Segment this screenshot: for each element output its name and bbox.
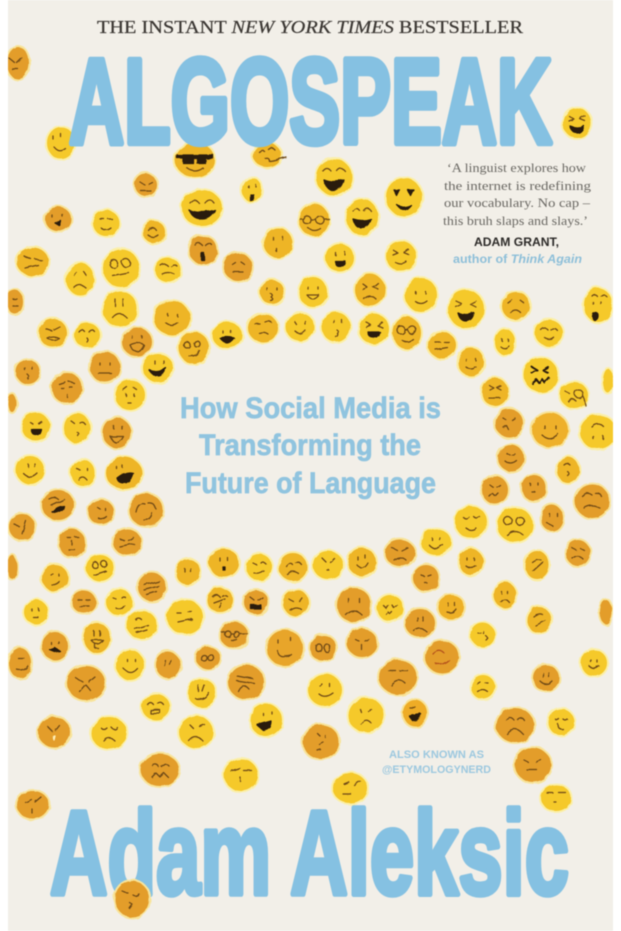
icon: smile face bbox=[15, 455, 45, 485]
icon: wire glasses face bbox=[219, 621, 249, 649]
icon: squinting face bbox=[137, 572, 167, 602]
icon: face at edge bbox=[6, 554, 18, 580]
icon: pained face bbox=[574, 483, 610, 519]
icon: grin face bbox=[325, 243, 355, 273]
icon: smile face bbox=[531, 412, 569, 448]
icon: worried face bbox=[134, 173, 158, 197]
icon: open mouth face bbox=[121, 327, 153, 357]
icon: sleepy face bbox=[376, 594, 404, 622]
icon: face at edge bbox=[6, 289, 24, 315]
icon: round eyes face bbox=[102, 248, 140, 288]
icon: squinting laugh face bbox=[447, 289, 485, 329]
icon: laughing face bbox=[249, 703, 283, 737]
icon: small smile face bbox=[497, 444, 525, 472]
icon: frowning squint face bbox=[354, 273, 386, 307]
icon: smile face bbox=[347, 547, 377, 577]
icon: worried face bbox=[114, 379, 146, 411]
icon: surprised face bbox=[302, 724, 340, 760]
icon: smile face bbox=[298, 276, 328, 308]
icon: upside-down face bbox=[579, 414, 617, 450]
icon: grumpy face bbox=[16, 247, 50, 277]
icon: angry face bbox=[37, 716, 71, 748]
icon: smile face bbox=[580, 649, 608, 677]
icon: winking face bbox=[63, 412, 91, 444]
icon: kissing face bbox=[259, 279, 285, 305]
icon: shouting face bbox=[41, 489, 75, 521]
icon: sad wink face bbox=[70, 459, 96, 487]
icon: smirking face bbox=[437, 594, 465, 620]
icon: sad face bbox=[65, 262, 95, 296]
icon: arch brow face bbox=[73, 322, 101, 348]
icon: frown face bbox=[347, 697, 385, 733]
icon: face at edge bbox=[7, 393, 17, 413]
icon: laughing face bbox=[315, 158, 353, 196]
icon: face at edge bbox=[602, 368, 614, 394]
icon: smile face bbox=[126, 610, 158, 640]
icon: worried face bbox=[470, 674, 496, 700]
icon: face overlapping author name bbox=[114, 880, 150, 918]
icon: pained face bbox=[8, 513, 36, 541]
icon: gritted face bbox=[112, 528, 142, 556]
icon: angry wobbly face bbox=[16, 790, 50, 820]
also known as note: @ETYMOLOGYNERD bbox=[382, 764, 491, 776]
icon: tongue out face bbox=[83, 622, 111, 654]
icon: angry wink face bbox=[66, 665, 106, 701]
icon: pouting face bbox=[38, 318, 68, 348]
icon: sad face bbox=[493, 581, 517, 609]
icon: sad face bbox=[336, 587, 372, 623]
icon: sad face bbox=[495, 707, 535, 743]
icon: smile face bbox=[532, 664, 560, 692]
icon: sly face bbox=[128, 493, 164, 527]
icon: content face bbox=[92, 209, 120, 237]
endorsement quote bbox=[443, 161, 592, 266]
icon: sad face bbox=[378, 659, 418, 695]
icon: grumpy face bbox=[227, 664, 265, 700]
endorsement quote: the internet is redefining bbox=[444, 179, 592, 193]
icon: tongue face bbox=[187, 678, 217, 708]
subtitle: Future of Language bbox=[185, 467, 436, 500]
icon: winking face bbox=[105, 588, 133, 616]
icon: smile face bbox=[420, 528, 452, 556]
icon: angry face bbox=[312, 550, 344, 580]
icon: kissing face bbox=[470, 622, 496, 648]
icon: winking face bbox=[247, 313, 279, 343]
icon: moustache face bbox=[41, 631, 69, 661]
icon: smile face bbox=[41, 564, 69, 592]
icon: sad face bbox=[565, 539, 591, 567]
icon: angry teeth face bbox=[243, 589, 269, 615]
icon: smirking face bbox=[154, 257, 182, 283]
subtitle bbox=[180, 392, 441, 500]
icon: glasses face bbox=[392, 316, 422, 350]
icon: calm face bbox=[547, 708, 575, 736]
icon: kissing face bbox=[556, 456, 580, 484]
icon: grinning face bbox=[345, 198, 379, 236]
subtitle: Transforming the bbox=[199, 429, 421, 462]
icon: small smile face bbox=[494, 328, 516, 356]
icon: raised eyebrow face bbox=[223, 758, 259, 792]
icon: flat face bbox=[71, 590, 97, 614]
icon: sad face bbox=[501, 291, 531, 321]
icon: small face bbox=[412, 564, 440, 592]
also known as note: ALSO KNOWN AS bbox=[389, 749, 484, 761]
icon: smile face bbox=[307, 673, 343, 707]
icon: monocle face bbox=[559, 381, 589, 409]
icon: side smile face bbox=[524, 550, 550, 580]
icon: smiling face bbox=[153, 300, 191, 336]
icon: surprised face bbox=[540, 504, 564, 532]
icon: shocked face bbox=[188, 235, 218, 265]
icon: flat face bbox=[166, 599, 204, 635]
icon: flat face bbox=[427, 331, 457, 359]
icon: moustache face bbox=[211, 321, 243, 349]
icon: surprised squint face bbox=[540, 784, 572, 812]
endorsement quote: our vocabulary. No cap – bbox=[444, 196, 591, 210]
icon: fretful face bbox=[494, 408, 524, 438]
icon: squinting laugh face bbox=[562, 107, 592, 139]
icon: surprised face bbox=[241, 177, 263, 203]
icon: angry face bbox=[6, 46, 30, 80]
icon: pained face bbox=[278, 552, 308, 582]
icon: sunglasses face bbox=[174, 142, 216, 178]
icon: surprised face bbox=[44, 206, 72, 232]
endorsement quote: this bruh slaps and slays.’ bbox=[443, 214, 588, 228]
icon: wry face bbox=[206, 587, 234, 613]
icon: grimace face bbox=[481, 475, 509, 505]
icon: kissing face bbox=[321, 311, 351, 343]
icon: smile face bbox=[285, 312, 315, 342]
icon: open mouth face bbox=[21, 412, 51, 442]
icon: skeptical face bbox=[332, 772, 368, 804]
icon: squint face bbox=[481, 377, 509, 407]
icon: laughing face bbox=[402, 699, 428, 727]
icon: big smile face bbox=[266, 629, 304, 667]
icon: sleepy face bbox=[514, 747, 552, 783]
icon: angry frown face bbox=[384, 539, 416, 567]
icon: raised brow face bbox=[178, 331, 210, 365]
icon: small face bbox=[23, 599, 49, 625]
icon: annoyed face bbox=[89, 351, 121, 383]
icon: heart eyes face bbox=[385, 177, 423, 217]
icon: laughing face bbox=[142, 353, 174, 383]
icon: yelling face bbox=[105, 456, 143, 490]
icon: surprised face bbox=[521, 474, 547, 502]
icon: surprised face bbox=[263, 227, 293, 259]
subtitle: How Social Media is bbox=[180, 392, 441, 425]
icon: winking face bbox=[245, 553, 273, 581]
icon: shocked face bbox=[583, 287, 613, 323]
icon: neutral face bbox=[58, 528, 86, 558]
also known as note bbox=[382, 749, 491, 776]
icon: smiling face bbox=[46, 126, 76, 160]
icon: wink smile face bbox=[424, 640, 460, 674]
icon: calm sleepy face bbox=[454, 505, 488, 539]
icon: crooked face bbox=[87, 499, 115, 525]
icon: surprised face bbox=[208, 548, 240, 578]
icon: calm face bbox=[404, 277, 438, 313]
icon: startled face bbox=[155, 651, 181, 679]
icon: squinting laugh face bbox=[358, 313, 390, 345]
icon: kissing face with party horn bbox=[252, 142, 286, 168]
icon: smile face bbox=[457, 347, 485, 377]
icon: smile face bbox=[458, 548, 484, 576]
icon: teeth smile face bbox=[141, 693, 171, 721]
icon: content face bbox=[142, 220, 166, 244]
icon: sad closed eyes face bbox=[90, 716, 128, 750]
icon: happy face bbox=[102, 417, 132, 449]
icon: sad wink face bbox=[178, 715, 214, 749]
icon: face at edge bbox=[599, 599, 613, 625]
icon: zigzag mouth face bbox=[523, 357, 559, 393]
icon: round eyes face bbox=[309, 634, 337, 662]
icon: worried face bbox=[404, 608, 436, 638]
top banner text: THE INSTANT NEW YORK TIMES BESTSELLER bbox=[97, 17, 523, 37]
icon: frown face bbox=[102, 290, 138, 328]
icon: startled face bbox=[51, 372, 83, 404]
icon: squint face bbox=[385, 240, 417, 272]
icon: smile face bbox=[115, 649, 145, 681]
icon: round eyes face bbox=[85, 554, 115, 582]
icon: grinning face bbox=[181, 189, 223, 227]
endorsement quote: ‘A linguist explores how bbox=[447, 161, 586, 175]
endorser credit: author of Think Again bbox=[453, 254, 582, 266]
icon: glasses face bbox=[298, 203, 330, 237]
icon: round eyes face bbox=[195, 646, 221, 670]
icon: worried face bbox=[223, 252, 253, 282]
icon: annoyed face bbox=[282, 589, 310, 617]
icon: round eyes sad face bbox=[496, 507, 534, 543]
icon: wavy mouth face bbox=[140, 753, 180, 787]
icon: crying face bbox=[346, 628, 378, 658]
icon: wry face bbox=[526, 606, 552, 634]
icon: face at edge bbox=[8, 647, 32, 679]
icon: startled face bbox=[15, 359, 41, 385]
icon: calm face bbox=[534, 319, 564, 347]
endorser name: ADAM GRANT, bbox=[474, 235, 559, 249]
icon: small face bbox=[175, 558, 201, 586]
